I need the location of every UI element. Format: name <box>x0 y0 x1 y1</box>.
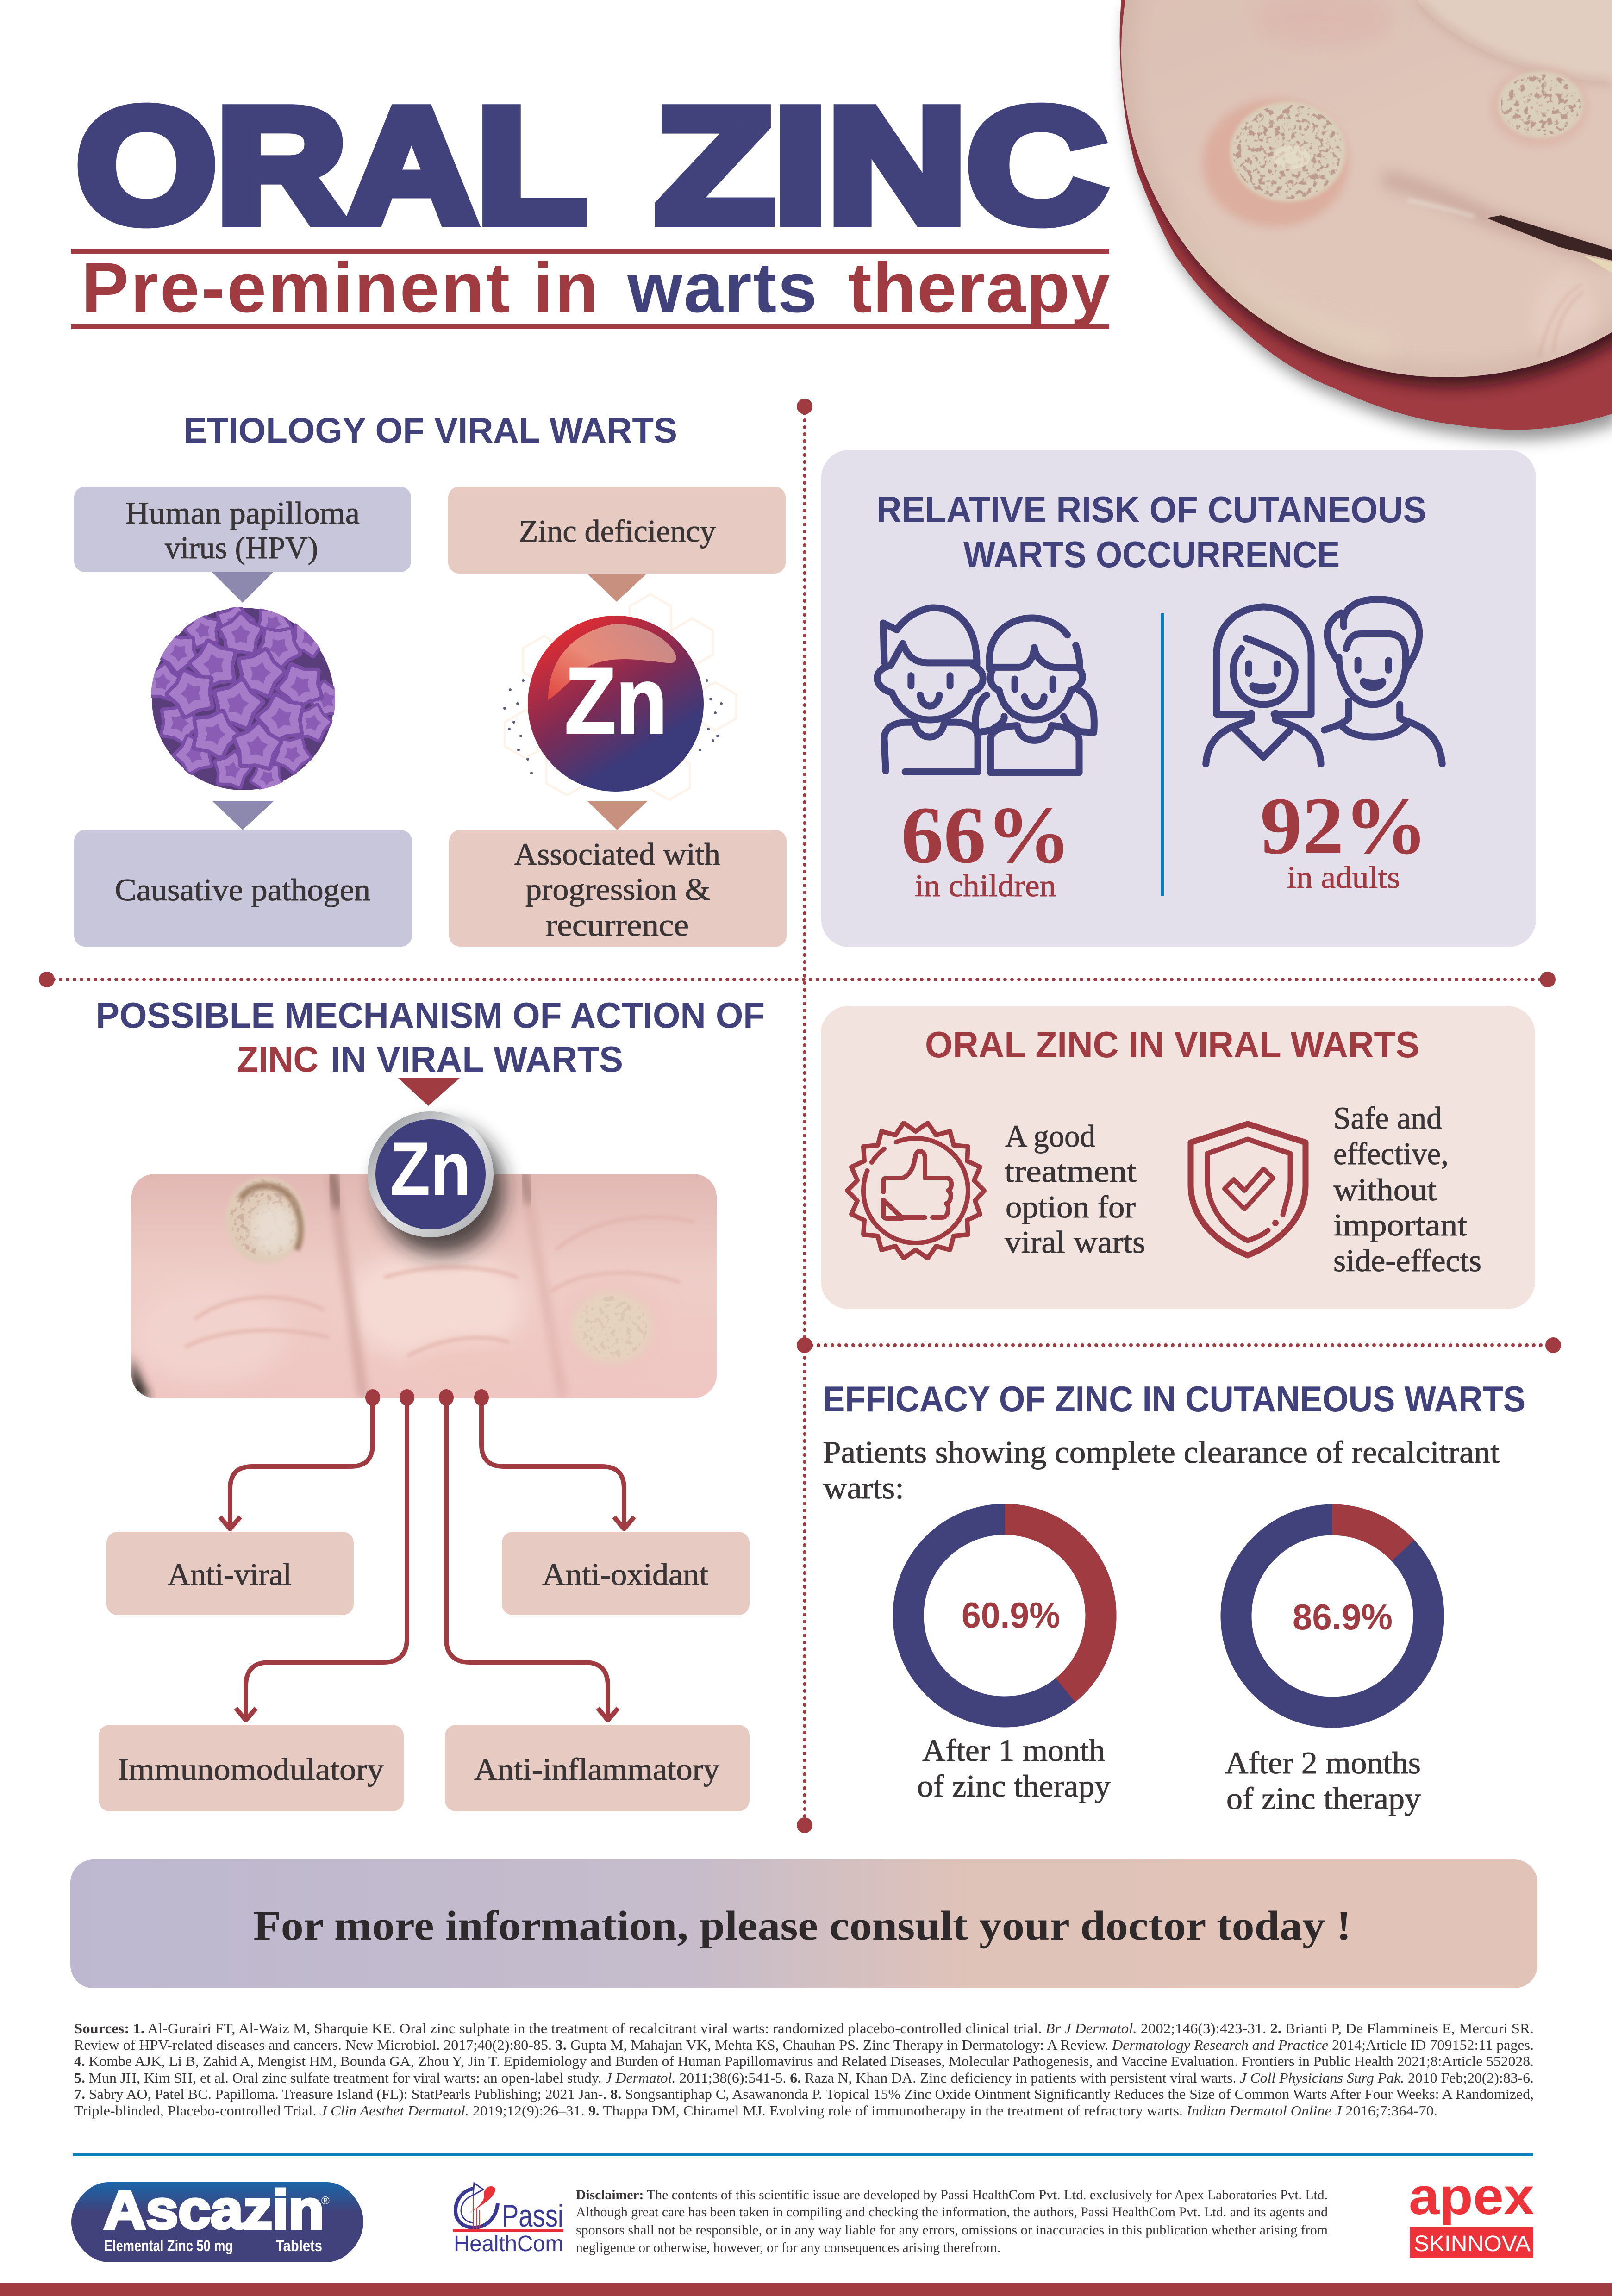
subtitle with rules: warts <box>627 248 817 327</box>
text: good treatment option: option for <box>1006 1189 1136 1224</box>
heading: mechanism <box>96 995 765 1079</box>
chart: donut 60.9 percent: 60.9% <box>962 1595 1060 1635</box>
arrow: to immunomodulatory <box>236 1398 407 1720</box>
text: good treatment option: A good <box>1005 1118 1095 1154</box>
arrow: virus to pathogen <box>212 801 274 830</box>
footer bar <box>0 2283 1612 2296</box>
wart: small <box>1491 69 1587 146</box>
heading: etiology: ETIOLOGY OF VIRAL WARTS <box>183 411 677 450</box>
box: zinc deficiency <box>448 487 786 574</box>
photo: warts on fingers with red crescent <box>1111 0 1612 440</box>
box: anti-oxidant <box>502 1532 750 1615</box>
logo: passi healthcom <box>453 2183 563 2256</box>
heading: mechanism: POSSIBLE MECHANISM OF ACTION OF <box>96 995 765 1036</box>
heading: mechanism: IN VIRAL WARTS <box>331 1039 623 1079</box>
heading: mechanism: ZINC <box>237 1039 319 1079</box>
text: after 2 months: After 2 months <box>1225 1745 1421 1780</box>
logo: apex skinnova: SKINNOVA <box>1414 2232 1531 2256</box>
text: after 1 month: After 1 month <box>922 1733 1105 1768</box>
text: after 2 months: of zinc therapy <box>1226 1781 1421 1816</box>
icon: zn badge: Zn <box>390 1126 471 1211</box>
text: safe and effective: without <box>1333 1172 1437 1207</box>
chart: donut 86.9 percent <box>1236 1520 1429 1712</box>
box: associated with progression and recurrence: progression & <box>525 872 710 907</box>
call to action banner <box>70 1859 1537 1988</box>
text: safe and effective <box>1333 1100 1481 1278</box>
sources: Sources: 1. Al-Gurairi FT, Al-Waiz M, Sharquie KE. Oral zinc sulphate in the treatment of recalcitrant viral warts: randomized placebo-controlled clinical trial. Br J Dermatol. 2002;146(3):423-31. 2. Brianti P, De Flammineis E, Mercuri SR. <box>74 2020 1534 2036</box>
heading: relative risk <box>876 489 1426 575</box>
disclaimer: Disclaimer: The contents of this scientific issue are developed by Passi HealthCom Pvt. Ltd. exclusively for Apex Laboratories Pvt. Ltd. <box>576 2187 1328 2202</box>
icon: zinc sphere <box>503 594 736 800</box>
logo: apex skinnova <box>1409 2167 1534 2258</box>
icon: adults <box>1206 599 1442 764</box>
sources: 4. Kombe AJK, Li B, Zahid A, Mengist HM, Bounda GA, Zhou Y, Jin T. Epidemiology and Burden of Human Papillomavirus and Related Diseases, Molecular Pathogenesis, and Vaccine Evaluation. Frontiers in Public Health 2021;8:Article 552028. <box>74 2053 1534 2069</box>
box: anti-oxidant: Anti-oxidant <box>542 1557 708 1592</box>
logo: ascazin: ® <box>321 2195 330 2207</box>
call to action banner: For more information, please consult your doctor today ! <box>253 1903 1351 1949</box>
chart: donut 86.9 percent: 86.9% <box>1293 1597 1393 1637</box>
text: after 2 months <box>1225 1745 1421 1816</box>
panel: etiology of viral warts <box>74 411 787 947</box>
chart: donut 60.9 percent <box>908 1519 1101 1712</box>
sources: 5. Mun JH, Kim SH, et al. Oral zinc sulfate treatment for viral warts: an open-label study. J Dermatol. 2011;38(6):541-5. 6. Raza N, Khan DA. Zinc deficiency in patients with persistent viral warts. J Coll Physicians Surg Pak. 2010 Feb;20(2):83-6. <box>74 2070 1534 2086</box>
arrow: to anti-viral <box>220 1398 373 1529</box>
logo: passi healthcom: HealthCom <box>454 2232 563 2256</box>
heading: relative risk: WARTS OCCURRENCE <box>963 534 1340 575</box>
title <box>76 75 1106 256</box>
logo: ascazin: Ascazin <box>104 2179 324 2240</box>
stat: 92 percent in adults: in adults <box>1287 860 1400 895</box>
arrow: heading to zn <box>398 1078 460 1106</box>
sources: Triple-blinded, Placebo-controlled Trial. J Clin Aesthet Dermatol. 2019;12(9):26–31. 9. Thappa DM, Chiramel MJ. Evolving role of immunotherapy in the treatment of refractory warts. Indian Dermatol Online J 2016;7:364-70. <box>74 2103 1437 2119</box>
icon: zn badge <box>368 1111 504 1254</box>
icon: children <box>877 608 1094 773</box>
photo: warts on fingers <box>130 1170 717 1398</box>
disclaimer: sponsors shall not be responsible, or in any way liable for any errors, omissions or inaccuracies in this publication whether arising from <box>576 2222 1328 2238</box>
stat: 66 percent in children: in children <box>915 868 1056 903</box>
box: anti-viral: Anti-viral <box>168 1557 292 1592</box>
connector dots <box>365 1389 489 1406</box>
icon: zinc sphere: Zn <box>565 648 667 754</box>
box: causative pathogen <box>74 830 412 947</box>
subtitle with rules <box>71 248 1110 329</box>
text: safe and effective: important <box>1333 1207 1467 1242</box>
text: patients showing clearance <box>823 1435 1500 1505</box>
logo: ascazin: Tablets <box>276 2237 322 2255</box>
disclaimer: negligence or otherwise, however, or for any consequences arising therefrom. <box>576 2240 1000 2255</box>
arrow: to anti-oxidant <box>481 1398 634 1529</box>
dotted dividers <box>39 399 1561 1833</box>
text: safe and effective: effective, <box>1333 1136 1449 1171</box>
text: safe and effective: side-effects <box>1333 1243 1481 1278</box>
subtitle with rules: Pre-eminent in <box>81 248 598 327</box>
box: anti-viral <box>106 1532 354 1615</box>
box: human papilloma virus: Human papilloma <box>125 495 360 530</box>
disclaimer <box>576 2187 1328 2255</box>
stat: 92 percent in adults: 92% <box>1260 781 1428 871</box>
icon: shield check <box>1191 1124 1306 1255</box>
box: causative pathogen: Causative pathogen <box>115 872 370 907</box>
text: patients showing clearance: Patients showing complete clearance of recalcitrant <box>823 1435 1500 1470</box>
arrow: zinc deficiency to zn <box>587 574 646 602</box>
panel: efficacy of zinc <box>823 1379 1525 1816</box>
box: immunomodulatory <box>99 1725 404 1811</box>
box: associated with progression and recurrence <box>449 830 787 947</box>
disclaimer: Although great care has been taken in compiling and checking the information, the authors, Passi HealthCom Pvt. Ltd. and its agents and <box>576 2204 1328 2220</box>
logo: ascazin <box>71 2179 363 2262</box>
text: after 1 month: of zinc therapy <box>917 1768 1111 1803</box>
footer rule <box>73 2153 1533 2156</box>
text: good treatment option <box>1005 1118 1145 1260</box>
text: safe and effective: Safe and <box>1333 1100 1442 1136</box>
arrow: to anti-inflammatory <box>446 1398 618 1720</box>
stat: 66 percent in children: 66% <box>901 790 1071 880</box>
logo: apex skinnova: apex <box>1409 2167 1534 2225</box>
box: zinc deficiency: Zinc deficiency <box>519 513 716 549</box>
logo: ascazin: Elemental Zinc 50 mg <box>104 2237 233 2255</box>
title: ZINC <box>656 75 1106 256</box>
panel: mechanism of action <box>96 995 765 1811</box>
text: good treatment option: viral warts <box>1005 1224 1145 1260</box>
box: immunomodulatory: Immunomodulatory <box>118 1752 384 1787</box>
arrow: hpv to virus <box>212 572 273 603</box>
heading: efficacy: EFFICACY OF ZINC IN CUTANEOUS WARTS <box>823 1379 1525 1419</box>
sources: Review of HPV-related diseases and cancers. New Microbiol. 2017;40(2):80-85. 3. Gupta M, Mahajan VK, Mehta KS, Chauhan PS. Zinc Therapy in Dermatology: A Review. Dermatology Research and Practice 2014;Article ID 709152:11 pages. <box>74 2037 1534 2053</box>
box: associated with progression and recurrence: recurrence <box>546 907 689 942</box>
arrow: zn to association <box>587 801 648 830</box>
text: patients showing clearance: warts: <box>823 1470 904 1505</box>
title: ORAL <box>76 75 587 256</box>
box: anti-inflammatory <box>445 1725 750 1811</box>
sources: 7. Sabry AO, Patel BC. Papilloma. Treasure Island (FL): StatPearls Publishing; 2021 Jan-. 8. Songsantiphap C, Asawanonda P. Topical 15% Zinc Oxide Ointment Significantly Reduces the Size of Common Warts After Four Weeks: A Randomized, <box>74 2086 1534 2102</box>
heading: relative risk: RELATIVE RISK OF CUTANEOUS <box>876 489 1426 530</box>
divider <box>1161 613 1164 896</box>
wart: large <box>1202 99 1349 227</box>
box: human papilloma virus <box>74 487 411 572</box>
icon: thumbs up badge <box>847 1123 984 1259</box>
box: anti-inflammatory: Anti-inflammatory <box>474 1752 719 1787</box>
icon: papilloma virus <box>151 607 335 790</box>
subtitle with rules: therapy <box>848 248 1110 327</box>
box: human papilloma virus: virus (HPV) <box>165 530 318 565</box>
panel: oral zinc in viral warts <box>821 1006 1535 1309</box>
box: associated with progression and recurrence: Associated with <box>514 836 720 872</box>
heading: oral zinc in viral warts: ORAL ZINC IN VIRAL WARTS <box>925 1024 1419 1065</box>
panel: relative risk <box>821 450 1536 947</box>
sources <box>74 2020 1534 2119</box>
logo: passi healthcom: Passi <box>502 2198 563 2234</box>
text: after 1 month <box>917 1733 1111 1803</box>
text: good treatment option: treatment <box>1005 1154 1137 1189</box>
